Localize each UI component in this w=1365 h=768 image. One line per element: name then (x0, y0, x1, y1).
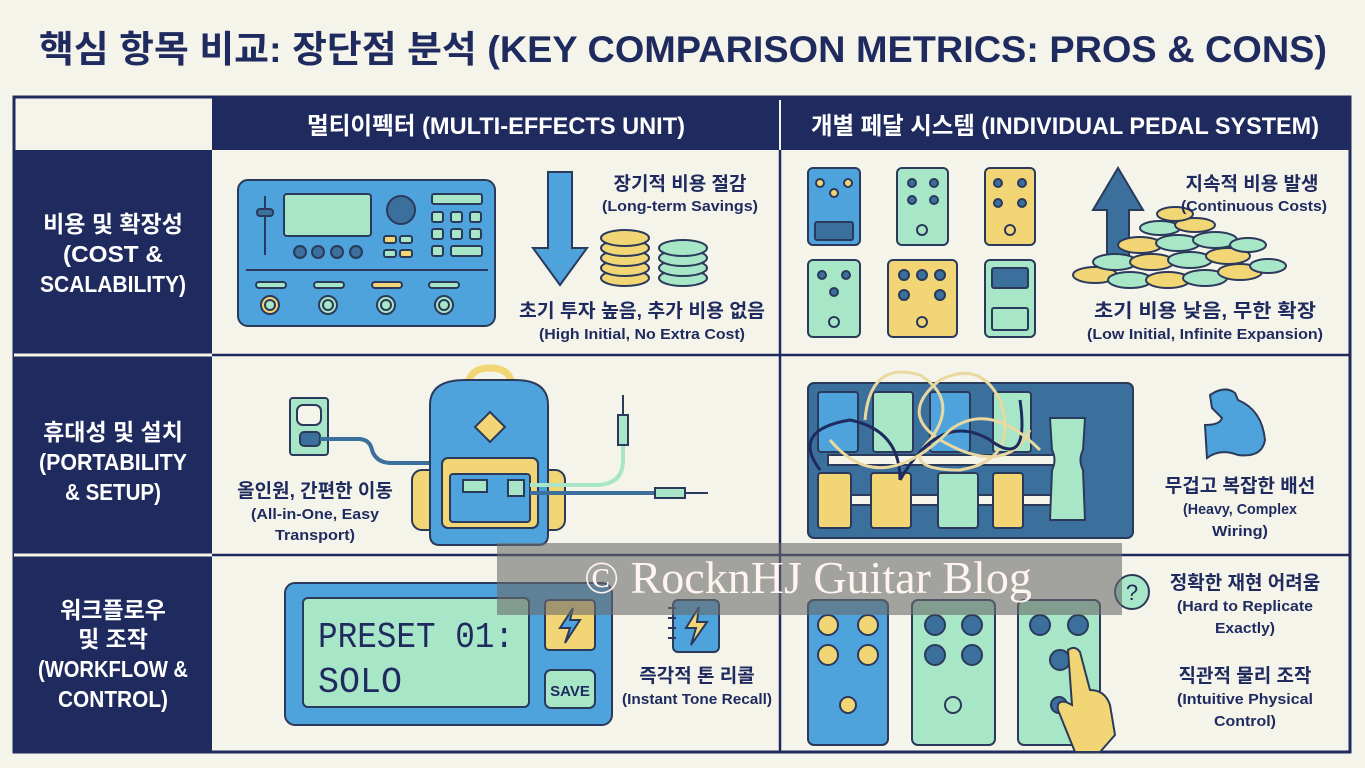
row label: workflow (38, 597, 188, 712)
text: high initial (519, 300, 765, 343)
text: heavy wiring: 무겁고 복잡한 배선 (1165, 475, 1315, 497)
text: long-term savings: 장기적 비용 절감 (614, 173, 746, 195)
row label: workflow: (WORKFLOW & (38, 656, 188, 682)
text: heavy wiring: Wiring) (1212, 523, 1268, 540)
text: hard to replicate (1170, 572, 1320, 637)
text: intuitive control: (Intuitive Physical (1177, 691, 1313, 708)
icon: six pedals (808, 168, 1035, 337)
row label: workflow: CONTROL) (58, 686, 168, 712)
text: long-term savings (602, 173, 758, 215)
icon: backpack with device (412, 368, 565, 545)
text: low initial: 초기 비용 낮음, 무한 확장 (1094, 300, 1316, 322)
text: all-in-one: Transport) (275, 527, 355, 544)
icon: coins (few) (601, 230, 707, 286)
text: high initial: 초기 투자 높음, 추가 비용 없음 (519, 300, 765, 322)
row label: cost: SCALABILITY) (40, 271, 186, 297)
icon: question bubble (1115, 575, 1149, 609)
arrow: up (1093, 168, 1143, 268)
icon: pedalboard with tangled cables (808, 372, 1133, 538)
row label: cost (40, 211, 186, 297)
icon: jack cables (530, 395, 708, 498)
text: low initial (1087, 300, 1323, 343)
icon: pointing hand (1058, 648, 1115, 752)
text: continuous costs: 지속적 비용 발생 (1186, 173, 1318, 195)
title: 핵심 항목 비교: 장단점 분석 (KEY COMPARISON METRICS: PROS & CONS) (39, 29, 1327, 70)
text: hard to replicate: Exactly) (1215, 620, 1275, 637)
icon: three pedals with knobs (808, 600, 1100, 745)
text: heavy wiring (1165, 475, 1315, 540)
text: intuitive control: 직관적 물리 조작 (1179, 665, 1311, 687)
watermark (497, 543, 1122, 615)
icon: preset display device (285, 583, 612, 725)
text: hard to replicate: 정확한 재현 어려움 (1170, 572, 1320, 594)
text: hard to replicate: (Hard to Replicate (1177, 598, 1313, 615)
icon: question bubble: ? (1126, 580, 1138, 605)
text: continuous costs (1181, 173, 1327, 215)
text: instant recall (622, 665, 772, 708)
row label: workflow: 워크플로우 (60, 597, 166, 623)
icon: coin pile (1073, 207, 1286, 288)
icon: flexed arm (1205, 389, 1265, 458)
row label: cost: 비용 및 확장성 (43, 211, 183, 237)
arrow: down (533, 172, 587, 285)
text: low initial: (Low Initial, Infinite Expansion) (1087, 326, 1323, 343)
row label: portability: & SETUP) (65, 479, 161, 505)
header: individual pedals: 개별 페달 시스템 (INDIVIDUAL PEDAL SYSTEM) (811, 113, 1319, 140)
row label: workflow: 및 조작 (78, 626, 148, 652)
icon: preset display device: SOLO (318, 662, 402, 703)
icon: wall outlet with cable (290, 398, 432, 463)
text: heavy wiring: (Heavy, Complex (1183, 501, 1298, 518)
text: instant recall: 즉각적 톤 리콜 (639, 665, 755, 687)
row label: portability: 휴대성 및 설치 (43, 419, 183, 445)
text: intuitive control: Control) (1214, 713, 1276, 730)
watermark: © RocknHJ Guitar Blog (584, 552, 1032, 603)
left label column (14, 150, 212, 752)
icon: preset display device: SAVE (550, 683, 590, 700)
text: all-in-one: (All-in-One, Easy (251, 506, 380, 523)
row label: portability (39, 419, 187, 505)
icon: multi-effects unit (238, 180, 495, 326)
header: multi-effects: 멀티이펙터 (MULTI-EFFECTS UNIT) (307, 113, 685, 140)
icon: preset display device: PRESET 01: (318, 617, 514, 658)
header row (212, 97, 1350, 150)
icon: recall notebook (668, 600, 719, 652)
text: instant recall: (Instant Tone Recall) (622, 691, 772, 708)
text: all-in-one: 올인원, 간편한 이동 (237, 480, 393, 502)
text: all-in-one (237, 480, 393, 544)
text: continuous costs: (Continuous Costs) (1181, 198, 1327, 215)
text: long-term savings: (Long-term Savings) (602, 198, 758, 215)
row label: cost: (COST & (63, 241, 163, 267)
text: intuitive control (1177, 665, 1313, 730)
text: high initial: (High Initial, No Extra Cost) (539, 326, 745, 343)
row label: portability: (PORTABILITY (39, 449, 187, 475)
